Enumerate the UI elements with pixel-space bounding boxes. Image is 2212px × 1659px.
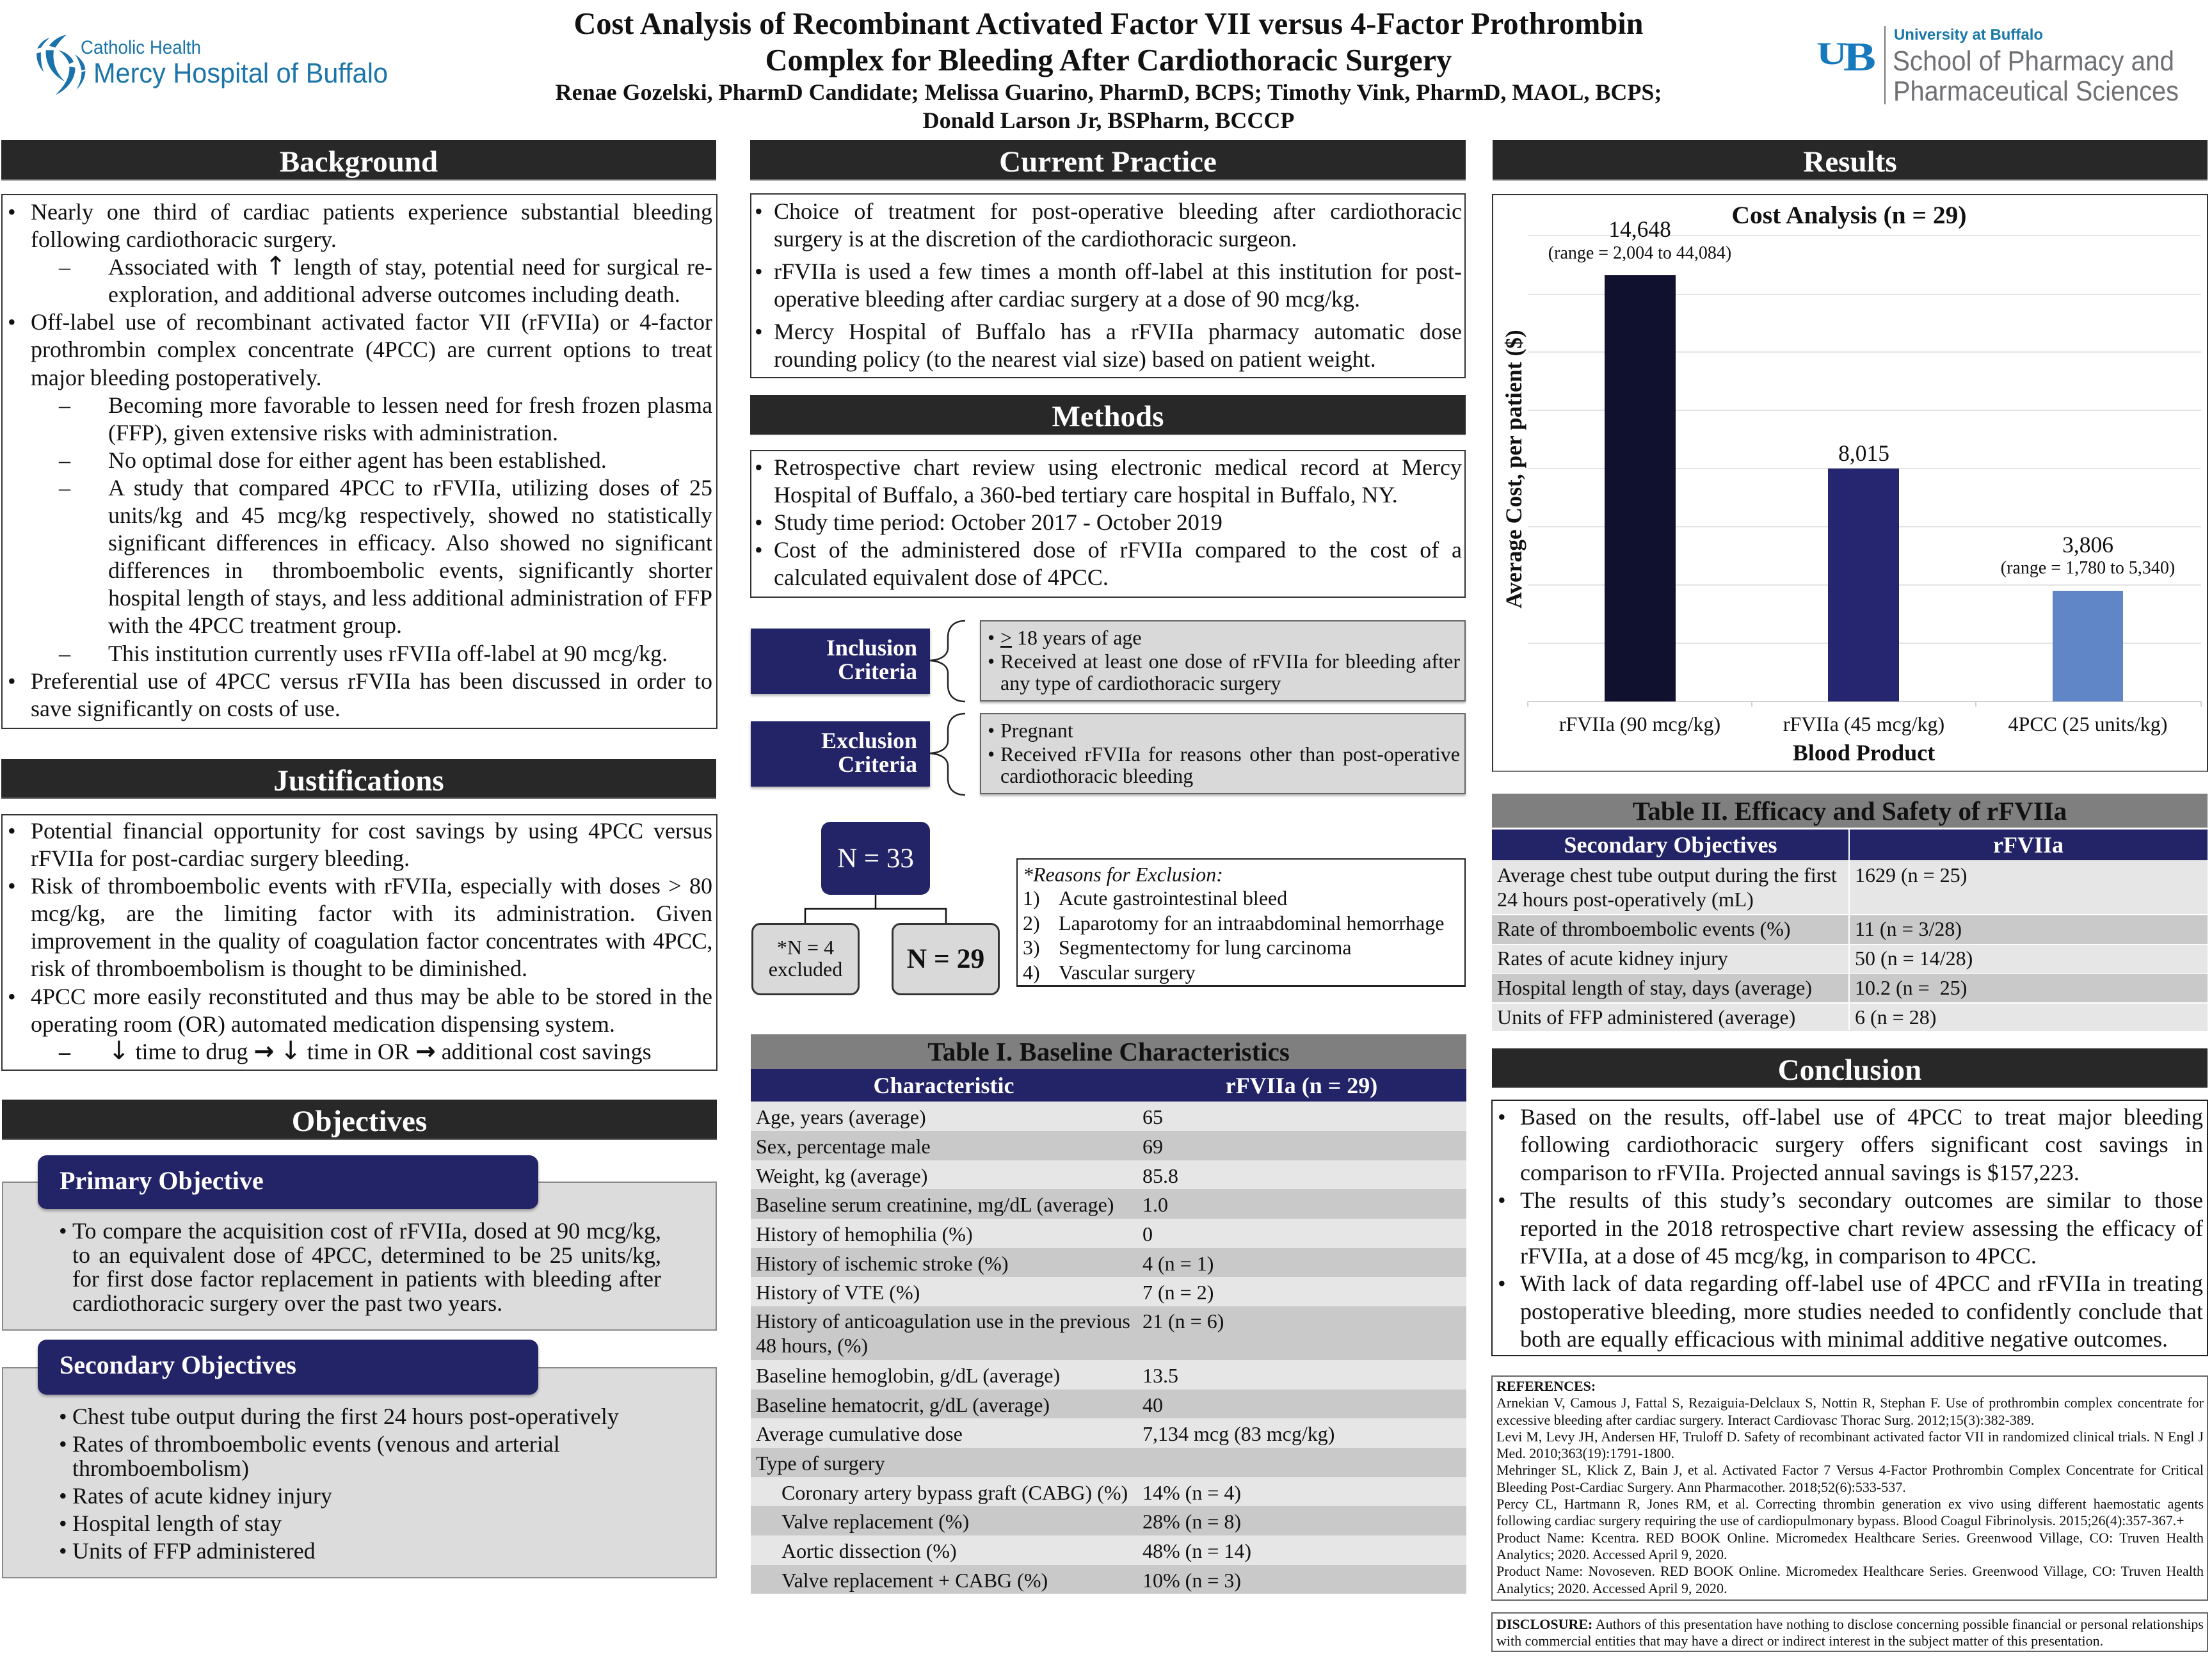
secondary objective: thromboembolic events: Rates of thromboembolic events (venous and arterial <box>72 1431 560 1457</box>
panel: reasons for exclusion: 4) <box>1023 960 1040 983</box>
value label: 8,015: 8,015 <box>1838 440 1889 466</box>
panel: disclosure <box>1491 1612 2208 1652</box>
heading: Methods <box>750 395 1466 435</box>
bullet: rFVIIa usage <box>755 259 1462 312</box>
table: baseline characteristics: Weight, kg (average) <box>756 1164 927 1187</box>
logo: University at Buffalo School of Pharmacy: University at Buffalo <box>1894 26 2043 44</box>
panel: disclosure: with commercial entities that may have a direct or indirect interest in the subject matter of this presentation. <box>1496 1633 2103 1649</box>
reason 2: Laparotomy for an intraabdominal hemorrhage <box>1059 911 1444 934</box>
panel: references: Product Name: Kcentra. RED BOOK Online. Micromedex Healthcare Series. Greenwood Village, CO: Truven Health <box>1496 1530 2204 1546</box>
panel: conclusion text: • <box>1498 1104 1506 1130</box>
sub-bullet: fresh frozen plasma: Becoming more favorable to lessen need for fresh frozen plasma <box>108 392 712 418</box>
conclusion bullet: more studies <box>1520 1270 2203 1354</box>
logo: Mercy Hospital of Buffalo: Catholic Health <box>81 37 201 58</box>
table: efficacy and safety: 6 (n = 28) <box>1855 1005 1936 1028</box>
table: baseline characteristics: Baseline serum creatinine, mg/dL (average) <box>756 1193 1114 1216</box>
bullet: thromboembolic risk <box>8 873 712 981</box>
value label: 3,806 <box>2001 532 2175 578</box>
bullet: chart review <box>755 454 1462 508</box>
bullet: study period: Study time period: October 2017 - October 2019 <box>774 509 1222 535</box>
bullet: rFVIIa usage: operative bleeding after cardiac surgery at a dose of 90 mcg/kg. <box>774 286 1360 312</box>
panel: disclosure: DISCLOSURE: Authors of this presentation have nothing to disclose concerning possible financial or personal relationships <box>1496 1616 2204 1632</box>
inclusion: rFVIIa dose: Received at least one dose of rFVIIa for bleeding after <box>1000 649 1460 672</box>
logo: Mercy Hospital of Buffalo <box>36 35 388 95</box>
bar chart: cost analysis <box>1492 194 2208 772</box>
bullet: bleeding prevalence <box>8 199 712 252</box>
bullet: preferential use <box>8 668 712 721</box>
pill: secondary objectives heading <box>38 1340 538 1395</box>
label: inclusion criteria <box>751 629 930 694</box>
bullet: preferential use: Preferential use of 4PCC versus rFVIIa has been discussed in order to <box>31 668 712 694</box>
reason 3 <box>1059 935 1464 960</box>
sub-bullet: comparison study: hospital length of stays, and less additional administration of FFP <box>108 585 712 611</box>
icon: UB mark <box>1816 34 1876 79</box>
box: N = 4 excluded: excluded <box>769 958 842 981</box>
conclusion bullet: cost savings: comparison to rFVIIa. Projected annual savings is $157,223. <box>1520 1160 2080 1185</box>
bullet: rounding policy: Mercy Hospital of Buffalo has a rFVIIa pharmacy automatic dose <box>774 319 1462 344</box>
panel: current practice text: • <box>755 198 763 224</box>
table header: Table I: rFVIIa (n = 29) <box>1226 1073 1377 1098</box>
heading: Results: Results <box>1803 145 1897 179</box>
pill: primary objective heading: Primary Objective <box>60 1166 264 1195</box>
panel: references: Analytics; 2020. Accessed April 9, 2020. <box>1496 1546 1727 1562</box>
table: efficacy and safety: 11 (n = 3/28) <box>1855 917 1962 940</box>
panel: secondary objectives: • <box>59 1482 67 1508</box>
table: baseline characteristics: History of anticoagulation use in the previous <box>756 1310 1130 1333</box>
panel: secondary objectives: • <box>59 1431 67 1457</box>
label: inclusion criteria: Inclusion <box>826 635 917 661</box>
secondary objective: thromboembolic events: thromboembolism) <box>72 1455 249 1481</box>
panel: conclusion text: • <box>1498 1270 1506 1296</box>
x-axis categories <box>1559 712 2167 735</box>
title: Cost Analysis of Recombinant Activated Factor VII versus 4-Factor Prothrombin <box>573 7 1644 41</box>
panel: references: Levi M, Levy JH, Andersen HF, Truloff D. Safety of recombinant activated factor VII in randomized clinical trials. N Engl J <box>1496 1429 2204 1445</box>
table: baseline characteristics: 1.0 <box>1142 1193 1168 1216</box>
panel: background text: – <box>59 475 70 501</box>
bar: rFVIIa 45 mcg/kg <box>1828 469 1899 701</box>
y-axis title: Average Cost, per patient ($) <box>1501 330 1527 609</box>
bullet: bleeding prevalence: Nearly one third of cardiac patients experience substantial bleeding <box>31 199 712 225</box>
table header: Table II <box>1492 830 2208 860</box>
secondary objective: length of stay: Hospital length of stay <box>72 1511 282 1536</box>
table: baseline characteristics: 4 (n = 1) <box>1142 1252 1214 1275</box>
conclusion bullet: cost savings <box>1520 1103 2203 1187</box>
table: baseline characteristics: History of ischemic stroke (%) <box>756 1252 1009 1275</box>
panel: background text <box>1 194 717 729</box>
x-axis categories: 4PCC (25 units/kg) <box>2008 712 2167 735</box>
sub-bullet: optimal dose: No optimal dose for either agent has been established. <box>108 447 607 473</box>
panel: inclusion criteria list: • <box>988 626 995 649</box>
table: baseline characteristics: Aortic dissection (%) <box>781 1539 957 1562</box>
table: baseline characteristics: Baseline hematocrit, g/dL (average) <box>756 1393 1050 1416</box>
bullet: treatment choice: Choice of treatment for post-operative bleeding after cardiothoracic <box>774 198 1462 224</box>
bullet: cost comparison: calculated equivalent dose of 4PCC. <box>774 565 1109 590</box>
table: baseline characteristics: 13.5 <box>1142 1363 1178 1386</box>
table: baseline characteristics: Valve replacement + CABG (%) <box>781 1568 1048 1591</box>
panel: current practice text: • <box>755 319 763 344</box>
exclusion: other reasons: cardiothoracic bleeding <box>1000 764 1193 787</box>
secondary objective: FFP: Units of FFP administered <box>72 1537 316 1563</box>
reason 3: Segmentectomy for lung carcinoma <box>1059 936 1352 959</box>
panel: conclusion text <box>1491 1100 2208 1356</box>
label: inclusion criteria: Criteria <box>838 659 917 684</box>
bullet: off-label options: major bleeding postoperatively. <box>31 365 322 390</box>
heading: Background <box>1 140 716 180</box>
table header: Table I <box>751 1069 1466 1102</box>
panel: references: REFERENCES: <box>1496 1378 1596 1394</box>
bullet: reconstitution: 4PCC more easily reconstituted and thus may be able to be stored in the <box>31 984 712 1009</box>
table: baseline characteristics: 7 (n = 2) <box>1142 1280 1214 1303</box>
table: baseline characteristics: 85.8 <box>1142 1164 1178 1187</box>
label: exclusion criteria <box>751 721 930 787</box>
panel: justifications text: • <box>8 873 16 899</box>
sub-bullet: comparison study: units/kg and 45 mcg/kg respectively, showed no statistically <box>108 502 712 528</box>
heading: Objectives <box>2 1100 717 1140</box>
table: baseline characteristics: Baseline hemoglobin, g/dL (average) <box>756 1363 1060 1386</box>
logo: University at Buffalo School of Pharmacy <box>1816 26 2179 106</box>
label: exclusion criteria: Exclusion <box>821 728 917 753</box>
table: baseline characteristics: History of VTE (%) <box>756 1280 920 1303</box>
table: baseline characteristics: Valve replacement (%) <box>781 1510 969 1533</box>
table: baseline characteristics: 14% (n = 4) <box>1142 1481 1241 1504</box>
panel: exclusion criteria list: • <box>988 719 995 742</box>
panel: background text: • <box>8 199 16 225</box>
table: efficacy and safety: Hospital length of stay, days (average) <box>1497 976 1812 999</box>
bullet: financial opportunity: Potential financial opportunity for cost savings by using 4PCC versus <box>31 818 712 844</box>
panel: reasons for exclusion: 3) <box>1023 936 1040 959</box>
panel: methods text: • <box>755 537 763 563</box>
table: baseline characteristics: 10% (n = 3) <box>1142 1568 1241 1591</box>
box: N = 29: N = 29 <box>907 943 984 974</box>
panel: references: Analytics; 2020. Accessed April 9, 2020. <box>1496 1580 1727 1596</box>
secondary objective: kidney injury: Rates of acute kidney injury <box>72 1482 332 1508</box>
table title: Table II: Table II. Efficacy and Safety of rFVIIa <box>1633 796 2067 826</box>
panel: primary objective: • <box>59 1218 67 1244</box>
sub-bullet: comparison study: A study that compared 4PCC to rFVIIa, utilizing doses of 25 <box>108 475 712 501</box>
panel: references: Med. 2010;363(19):1791-1800. <box>1496 1445 1674 1461</box>
panel: justifications text: • <box>8 818 16 844</box>
reason 4 <box>1059 960 1464 984</box>
panel: secondary objectives: • <box>59 1537 67 1563</box>
brace: inclusion <box>929 620 965 703</box>
bullet: treatment choice: surgery is at the discretion of the cardiothoracic surgeon. <box>774 226 1297 252</box>
table header: Table II: Secondary Objectives <box>1564 832 1777 858</box>
panel: justifications text <box>1 814 717 1071</box>
secondary objective: thromboembolic events <box>59 1431 560 1481</box>
panel: references: following cardiac surgery requiring the use of cardiopulmonary bypass. Blood Coagul Fibrinolysis. 2015;26(4):357-367.+ <box>1496 1512 2184 1528</box>
inclusion: rFVIIa dose <box>988 649 1460 694</box>
bullet: off-label options: Off-label use of recombinant activated factor VII (rFVIIa) or 4-factor <box>31 309 712 335</box>
reasons heading: *Reasons for Exclusion: <box>1023 863 1223 886</box>
table title: Table II <box>1492 794 2208 828</box>
sub-bullet: fresh frozen plasma: (FFP), given extensive risks with administration. <box>108 420 558 445</box>
bullet: financial opportunity: rFVIIa for post-cardiac surgery bleeding. <box>31 846 410 871</box>
panel: methods text: • <box>755 509 763 535</box>
sub-bullet: comparison study <box>59 475 712 638</box>
table: baseline characteristics: 40 <box>1142 1393 1163 1416</box>
conclusion bullet: secondary outcomes: rFVIIa, at a dose of 45 mcg/kg, in comparison to 4PCC. <box>1520 1243 2037 1269</box>
sub-bullet: comparison study: differences in thromboembolic events, significantly shorter <box>108 557 712 583</box>
authors <box>556 79 1662 133</box>
x-axis title: Blood Product <box>1793 740 1935 765</box>
panel: exclusion criteria list: • <box>988 742 995 765</box>
panel: references: Arnekian V, Camous J, Fattal S, Rezaiguia-Delclaux S, Nottin R, Stephan F. Use of prothrombin complex concentrate for <box>1496 1395 2204 1411</box>
logo: Mercy Hospital of Buffalo: Mercy Hospital of Buffalo <box>93 58 388 89</box>
panel: background text: – <box>59 640 70 666</box>
bullet: thromboembolic risk: Risk of thromboembolic events with rFVIIa, especially with doses > 80 <box>31 873 712 899</box>
bullet: off-label options <box>8 309 712 390</box>
panel: conclusion text: • <box>1498 1187 1506 1213</box>
brace: exclusion <box>929 713 965 796</box>
sub-bullet: associated outcomes: exploration, and additional adverse outcomes including death. <box>108 282 680 307</box>
panel: background text: – <box>59 447 70 473</box>
table title: Table I: Table I. Baseline Characteristics <box>927 1037 1290 1066</box>
primary objective text: to an equivalent dose of 4PCC, determined to be 25 units/kg, <box>72 1242 661 1267</box>
table: efficacy and safety: Rate of thromboembolic events (%) <box>1497 917 1791 940</box>
panel: reasons for exclusion <box>1016 858 1466 987</box>
heading: Background: Background <box>280 145 438 179</box>
panel: references: Percy CL, Hartmann R, Jones RM, et al. Correcting thrombin generation ex vivo using different haemostatic agents <box>1496 1496 2204 1512</box>
conclusion bullet: secondary outcomes: reported in the 2018 retrospective chart review assessing the efficacy of <box>1520 1215 2203 1241</box>
panel: justifications text: • <box>8 984 16 1009</box>
bullet: thromboembolic risk: mcg/kg, are the limiting factor with its administration. Given <box>31 901 712 926</box>
table: baseline characteristics: Average cumulative dose <box>756 1422 963 1445</box>
panel: background text: • <box>8 309 16 335</box>
bar: 4PCC 25 units/kg <box>2053 591 2123 701</box>
label: exclusion criteria: Criteria <box>838 751 917 777</box>
bullet: rounding policy <box>755 319 1462 372</box>
table: efficacy and safety: Average chest tube output during the first <box>1497 863 1837 886</box>
table: baseline characteristics: Type of surgery <box>756 1452 885 1475</box>
table: baseline characteristics: 65 <box>1142 1105 1163 1128</box>
panel: reasons for exclusion: 1) <box>1023 886 1040 910</box>
title: Complex for Bleeding After Cardiothoracic Surgery <box>765 44 1452 77</box>
conclusion bullet: more studies: With lack of data regarding off-label use of 4PCC and rFVIIa in treating <box>1520 1270 2203 1296</box>
box: N = 4 excluded: *N = 4 <box>777 936 834 959</box>
box: N = 29 <box>892 923 1000 995</box>
bullet: reconstitution <box>8 984 712 1037</box>
panel: references: Product Name: Novoseven. RED BOOK Online. Micromedex Healthcare Series. Greenwood Village, CO: Truven Health <box>1496 1563 2204 1579</box>
sub-bullet: fresh frozen plasma <box>59 392 712 445</box>
table: baseline characteristics: 48% (n = 14) <box>1142 1539 1251 1562</box>
heading: Justifications <box>1 759 716 799</box>
table: baseline characteristics: Sex, percentage male <box>756 1135 931 1158</box>
inclusion: age: > 18 years of age <box>1000 626 1142 649</box>
table: baseline characteristics: 48 hours, (%) <box>756 1334 868 1357</box>
sub-bullet: comparison study: significant differences in efficacy. Also showed no significant <box>108 530 712 556</box>
flow connector <box>804 895 947 923</box>
panel: references: Bleeding Post-Cardiac Surgery. Ann Pharmacother. 2018;52(6):533-537. <box>1496 1479 1906 1495</box>
panel: references <box>1491 1375 2208 1601</box>
box: N = 33 <box>821 822 930 895</box>
panel: justifications text: – <box>59 1039 70 1064</box>
panel: current practice text <box>750 193 1466 378</box>
reason 4: Vascular surgery <box>1059 960 1196 983</box>
heading: Objectives: Objectives <box>292 1105 427 1138</box>
value label: 14,648 <box>1548 216 1731 263</box>
table: efficacy and safety: Rates of acute kidney injury <box>1497 947 1728 970</box>
table header: Table I: Characteristic <box>874 1073 1014 1098</box>
primary objective text <box>59 1218 661 1316</box>
sub-bullet: time savings: ↓ time to drug → ↓ time in OR → additional cost savings <box>108 1036 652 1066</box>
title <box>573 7 1644 77</box>
bullet: rounding policy: rounding policy (to the nearest vial size) based on patient weight. <box>774 346 1376 372</box>
sub-bullet: comparison study: with the 4PCC treatment group. <box>108 613 402 638</box>
reason 1 <box>1059 886 1464 910</box>
conclusion bullet: secondary outcomes: The results of this study’s secondary outcomes are similar to those <box>1520 1187 2203 1213</box>
panel: methods text: • <box>755 454 763 480</box>
panel: inclusion criteria list <box>980 620 1466 701</box>
exclusion: other reasons <box>988 742 1460 787</box>
box: N = 4 excluded <box>751 923 860 995</box>
bar: rFVIIa 90 mcg/kg <box>1605 275 1676 701</box>
table: efficacy and safety: 24 hours post-operatively (mL) <box>1497 888 1754 911</box>
bullet: treatment choice <box>755 198 1462 252</box>
panel: exclusion criteria list <box>980 713 1466 794</box>
panel: secondary objectives: • <box>59 1404 67 1429</box>
panel: background text: – <box>59 254 70 280</box>
table: baseline characteristics: History of hemophilia (%) <box>756 1222 973 1246</box>
sub-bullet: associated outcomes: Associated with ↑ length of stay, potential need for surgical re- <box>108 252 712 281</box>
table: baseline characteristics: 69 <box>1142 1135 1163 1158</box>
exclusion: other reasons: Received rFVIIa for reasons other than post-operative <box>1000 742 1460 765</box>
reason 1: Acute gastrointestinal bleed <box>1059 886 1287 910</box>
chart title: Cost Analysis (n = 29) <box>1731 201 1967 229</box>
icon: UB mark: B <box>1843 34 1876 79</box>
heading: Current Practice: Current Practice <box>999 145 1217 179</box>
table: baseline characteristics: 7,134 mcg (83 mcg/kg) <box>1142 1422 1334 1445</box>
table: baseline characteristics: Age, years (average) <box>756 1105 926 1128</box>
bullet: chart review: Retrospective chart review using electronic medical record at Mercy <box>774 454 1462 480</box>
heading: Justifications: Justifications <box>273 764 444 797</box>
heading: Results <box>1493 140 2208 180</box>
exclusion: pregnant: Pregnant <box>1000 719 1073 742</box>
heading: Methods: Methods <box>1052 400 1164 433</box>
bullet: reconstitution: operating room (OR) automated medication dispensing system. <box>31 1011 615 1037</box>
panel: secondary objectives: • <box>59 1511 67 1536</box>
bullet: off-label options: prothrombin complex concentrate (4PCC) are current options to treat <box>31 337 712 362</box>
conclusion bullet: secondary outcomes <box>1520 1187 2203 1270</box>
box: N = 33: N = 33 <box>837 844 914 874</box>
conclusion bullet: cost savings: Based on the results, off-label use of 4PCC to treat major bleeding <box>1520 1104 2203 1130</box>
panel: current practice text: • <box>755 259 763 284</box>
bullet: preferential use: save significantly on costs of use. <box>31 696 341 721</box>
value label: 3,806: 3,806 <box>2062 532 2113 557</box>
value label: 14,648: (range = 2,004 to 44,084) <box>1548 243 1731 263</box>
conclusion bullet: cost savings: following cardiothoracic surgery offers significant cost savings in <box>1520 1132 2203 1157</box>
authors: Donald Larson Jr, BSPharm, BCCCP <box>923 108 1294 133</box>
panel: references: excessive bleeding after cardiac surgery. Interact Cardiovasc Thorac Surg. 2012;15(3):382-389. <box>1496 1412 2034 1428</box>
value label: 14,648: 14,648 <box>1608 216 1671 242</box>
table title: Table I <box>751 1034 1466 1069</box>
inclusion: rFVIIa dose: any type of cardiothoracic surgery <box>1000 671 1281 694</box>
table: efficacy and safety: Units of FFP administered (average) <box>1497 1005 1795 1028</box>
secondary objective: chest tube: Chest tube output during the first 24 hours post-operatively <box>72 1404 619 1429</box>
icon: Mercy cross emblem <box>36 35 85 95</box>
panel: references: Mehringer SL, Klick Z, Bain J, et al. Activated Factor 7 Versus 4-Factor Prothrombin Complex Concentrate for Critical <box>1496 1462 2204 1478</box>
panel: methods text <box>750 450 1466 598</box>
bullet: cost comparison: Cost of the administered dose of rFVIIa compared to the cost of a <box>774 537 1462 563</box>
bullet: rFVIIa usage: rFVIIa is used a few times a month off-label at this institution for post- <box>774 259 1462 284</box>
panel: secondary objectives <box>2 1367 717 1578</box>
x-axis categories: rFVIIa (45 mcg/kg) <box>1783 712 1944 735</box>
table: efficacy and safety: 1629 (n = 25) <box>1855 863 1967 886</box>
table: efficacy and safety <box>1492 860 2208 1030</box>
sub-bullet: associated outcomes <box>59 252 712 307</box>
sub-bullet: institution use: This institution currently uses rFVIIa off-label at 90 mcg/kg. <box>108 640 668 666</box>
primary objective text: cardiothoracic surgery over the past two years. <box>72 1290 502 1316</box>
panel: primary objective <box>2 1182 717 1331</box>
value label: 3,806: (range = 1,780 to 5,340) <box>2001 558 2175 578</box>
table: baseline characteristics: Coronary artery bypass graft (CABG) (%) <box>781 1481 1128 1504</box>
authors: Renae Gozelski, PharmD Candidate; Melissa Guarino, PharmD, BCPS; Timothy Vink, PharmD, MAOL, BCPS; <box>556 79 1662 105</box>
panel: bar chart cost analysis <box>1492 194 2208 772</box>
table header: Table II: rFVIIa <box>1993 832 2064 858</box>
conclusion bullet: more studies: both are equally efficacious with minimal additive negative outcomes. <box>1520 1326 2168 1352</box>
panel: background text: – <box>59 392 70 418</box>
heading: Conclusion: Conclusion <box>1778 1054 1921 1087</box>
panel: inclusion criteria list: • <box>988 649 995 672</box>
table: baseline characteristics: 21 (n = 6) <box>1142 1310 1224 1333</box>
bullet: cost comparison <box>755 537 1462 590</box>
table: efficacy and safety: 10.2 (n = 25) <box>1855 976 1967 999</box>
table: efficacy and safety: 50 (n = 14/28) <box>1855 947 1973 970</box>
panel: background text: • <box>8 668 16 694</box>
heading: Current Practice <box>750 140 1466 180</box>
bullet: thromboembolic risk: improvement in the quality of coagulation factor concentrates with 4PCC, <box>31 928 712 954</box>
icon: UB mark: U <box>1816 35 1847 71</box>
x-axis categories: rFVIIa (90 mcg/kg) <box>1559 712 1720 735</box>
table: baseline characteristics: 28% (n = 8) <box>1142 1510 1241 1533</box>
heading: Conclusion <box>1492 1048 2208 1088</box>
table: baseline characteristics <box>751 1102 1466 1593</box>
panel: reasons for exclusion: 2) <box>1023 911 1040 934</box>
primary objective text: To compare the acquisition cost of rFVIIa, dosed at 90 mcg/kg, <box>72 1218 661 1244</box>
pill: secondary objectives heading: Secondary Objectives <box>60 1350 296 1379</box>
bullet: bleeding prevalence: following cardiothoracic surgery. <box>31 227 337 252</box>
pill: primary objective heading <box>38 1155 538 1209</box>
bullet: chart review: Hospital of Buffalo, a 360-bed tertiary care hospital in Buffalo, NY. <box>774 482 1398 508</box>
conclusion bullet: more studies: postoperative bleeding, more studies needed to confidently conclude that <box>1520 1299 2203 1324</box>
primary objective text: for first dose factor replacement in patients with bleeding after <box>72 1266 661 1292</box>
bullet: thromboembolic risk: risk of thromboembolism is thought to be diminished. <box>31 956 527 981</box>
bullet: financial opportunity <box>8 818 712 871</box>
table: baseline characteristics: 0 <box>1142 1222 1153 1246</box>
